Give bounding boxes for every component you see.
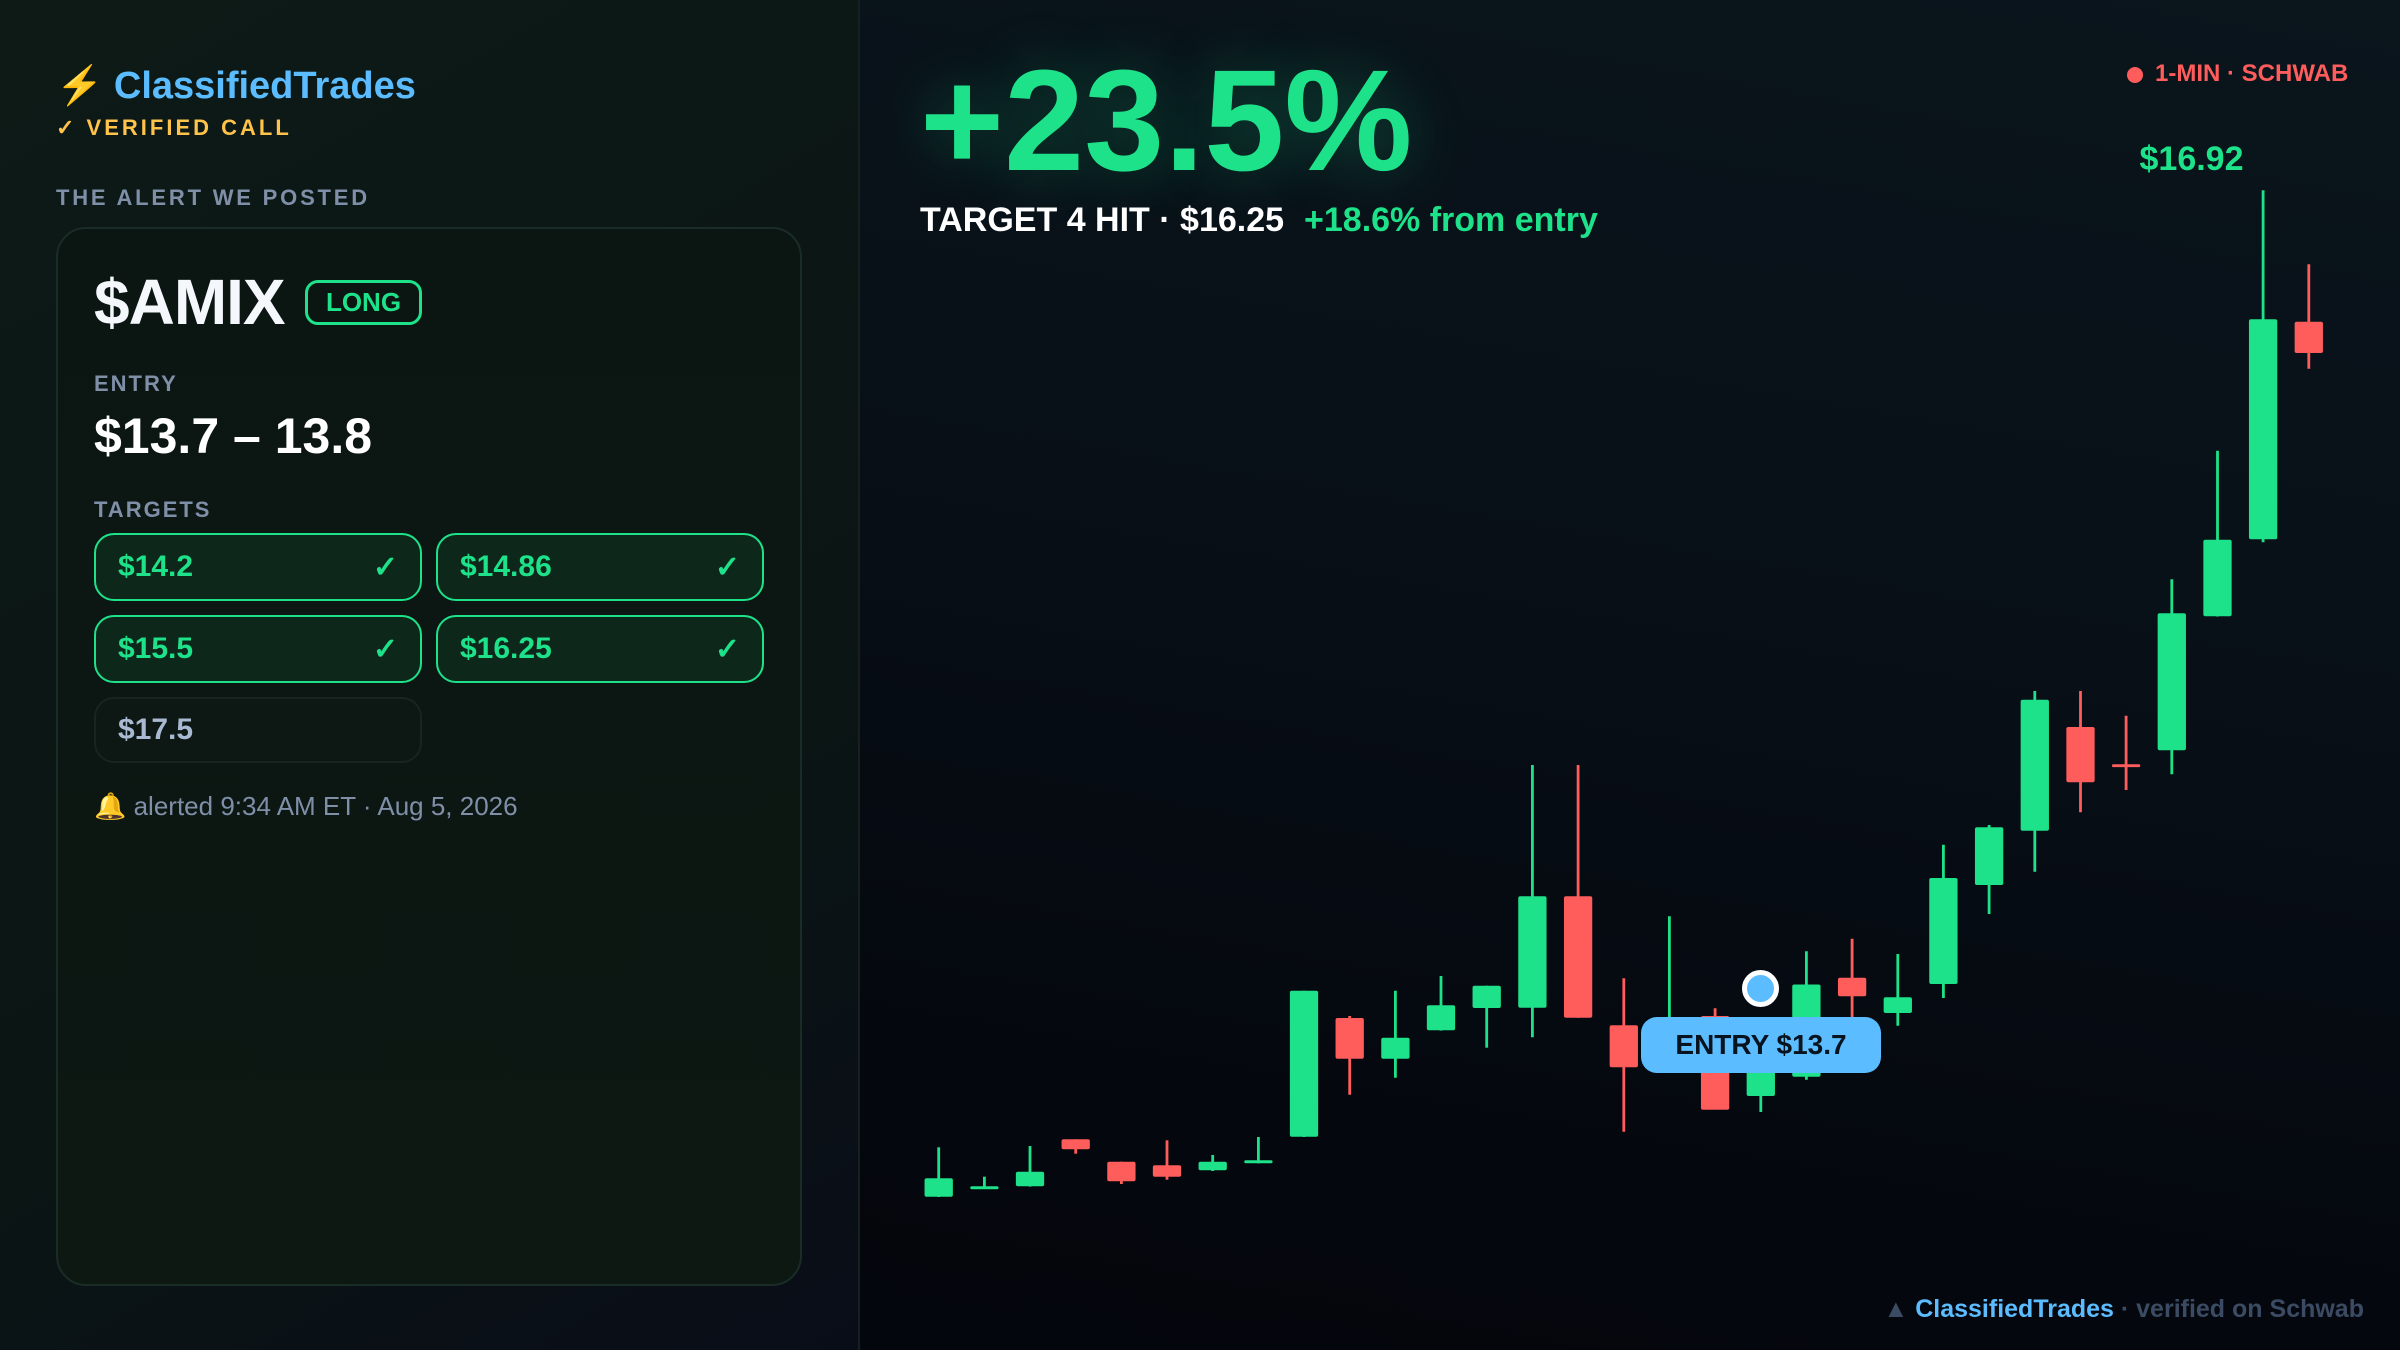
target 5 not hit [94, 697, 422, 763]
heading: the alert we posted: THE ALERT WE POSTED [56, 185, 370, 210]
candle 26 down [2066, 691, 2095, 812]
candle 19 up [1747, 1040, 1775, 1112]
target 1 [94, 533, 422, 601]
target 2: $14.86 [460, 550, 552, 583]
target 2: ✓ [715, 550, 740, 584]
entry label pill [1641, 1017, 1881, 1073]
target 4 [436, 615, 764, 683]
entry label: ENTRY [94, 371, 178, 396]
candle 20 up [1792, 951, 1821, 1080]
candle 4 down [1062, 1139, 1090, 1154]
candle 17 up [1655, 916, 1684, 1060]
candle 10 down [1336, 1016, 1364, 1095]
candle 3 up [1016, 1146, 1044, 1187]
entry label pill: ENTRY $13.7 [1675, 1029, 1847, 1060]
big gain figure: +23.5% [920, 40, 1412, 201]
candle 28 up [2158, 579, 2186, 774]
candle 22 up [1884, 954, 1912, 1026]
candle 1 up [925, 1147, 953, 1197]
candle 5 down [1107, 1162, 1136, 1184]
targets label: TARGETS [94, 497, 211, 522]
panel: alert card [56, 227, 802, 1286]
badge: long: LONG [326, 287, 401, 317]
candle 13 up [1473, 986, 1501, 1048]
alert timestamp: 🔔 alerted 9:34 AM ET · Aug 5, 2026 [94, 791, 518, 821]
target hit line: TARGET 4 HIT · $16.25 +18.6% from entry [920, 201, 1598, 239]
footer credit: ▲ ClassifiedTrades · verified on Schwab [1884, 1295, 2364, 1323]
candle 7 up [1199, 1155, 1227, 1171]
entry marker dot [1742, 970, 1779, 1007]
candle 15 down [1564, 765, 1592, 1018]
target 4: ✓ [715, 632, 740, 666]
candle 27 down [2112, 716, 2140, 790]
panel: chart side [860, 0, 2400, 1350]
candle 18 down [1701, 1008, 1729, 1110]
candle 12 up [1427, 976, 1455, 1031]
ticker: $AMIX [94, 266, 285, 338]
target 5 not hit: $17.5 [118, 713, 193, 746]
candle 9 up [1290, 991, 1318, 1137]
panel: left alert panel [0, 0, 860, 1350]
entry price range: $13.7 – 13.8 [94, 408, 372, 464]
target 1: $14.2 [118, 550, 193, 583]
verified call tag: ✓ VERIFIED CALL [56, 115, 292, 140]
target 3: $15.5 [118, 632, 193, 665]
live source tag: 1-MIN · SCHWAB [2155, 60, 2348, 87]
target 1: ✓ [373, 550, 398, 584]
candle 21 down [1838, 939, 1866, 1040]
target 3: ✓ [373, 632, 398, 666]
target 4: $16.25 [460, 632, 552, 665]
target 2 [436, 533, 764, 601]
brand logo: ⚡ ClassifiedTrades [56, 65, 416, 107]
candle 11 up [1381, 991, 1410, 1078]
badge: long [305, 280, 422, 325]
high price label: $16.92 [2140, 140, 2244, 178]
candle 24 up [1975, 825, 2003, 914]
candle 31 down [2295, 264, 2323, 369]
candle 29 up [2203, 451, 2232, 616]
candle 2 up [970, 1177, 999, 1189]
candle 6 down [1153, 1140, 1181, 1180]
candle 8 up [1244, 1137, 1273, 1163]
candle 30 up [2249, 190, 2277, 542]
target 3 [94, 615, 422, 683]
candle 25 up [2021, 691, 2049, 872]
candle 14 up [1518, 765, 1547, 1037]
candle 16 down [1610, 978, 1638, 1132]
candle 23 up [1929, 845, 1958, 998]
